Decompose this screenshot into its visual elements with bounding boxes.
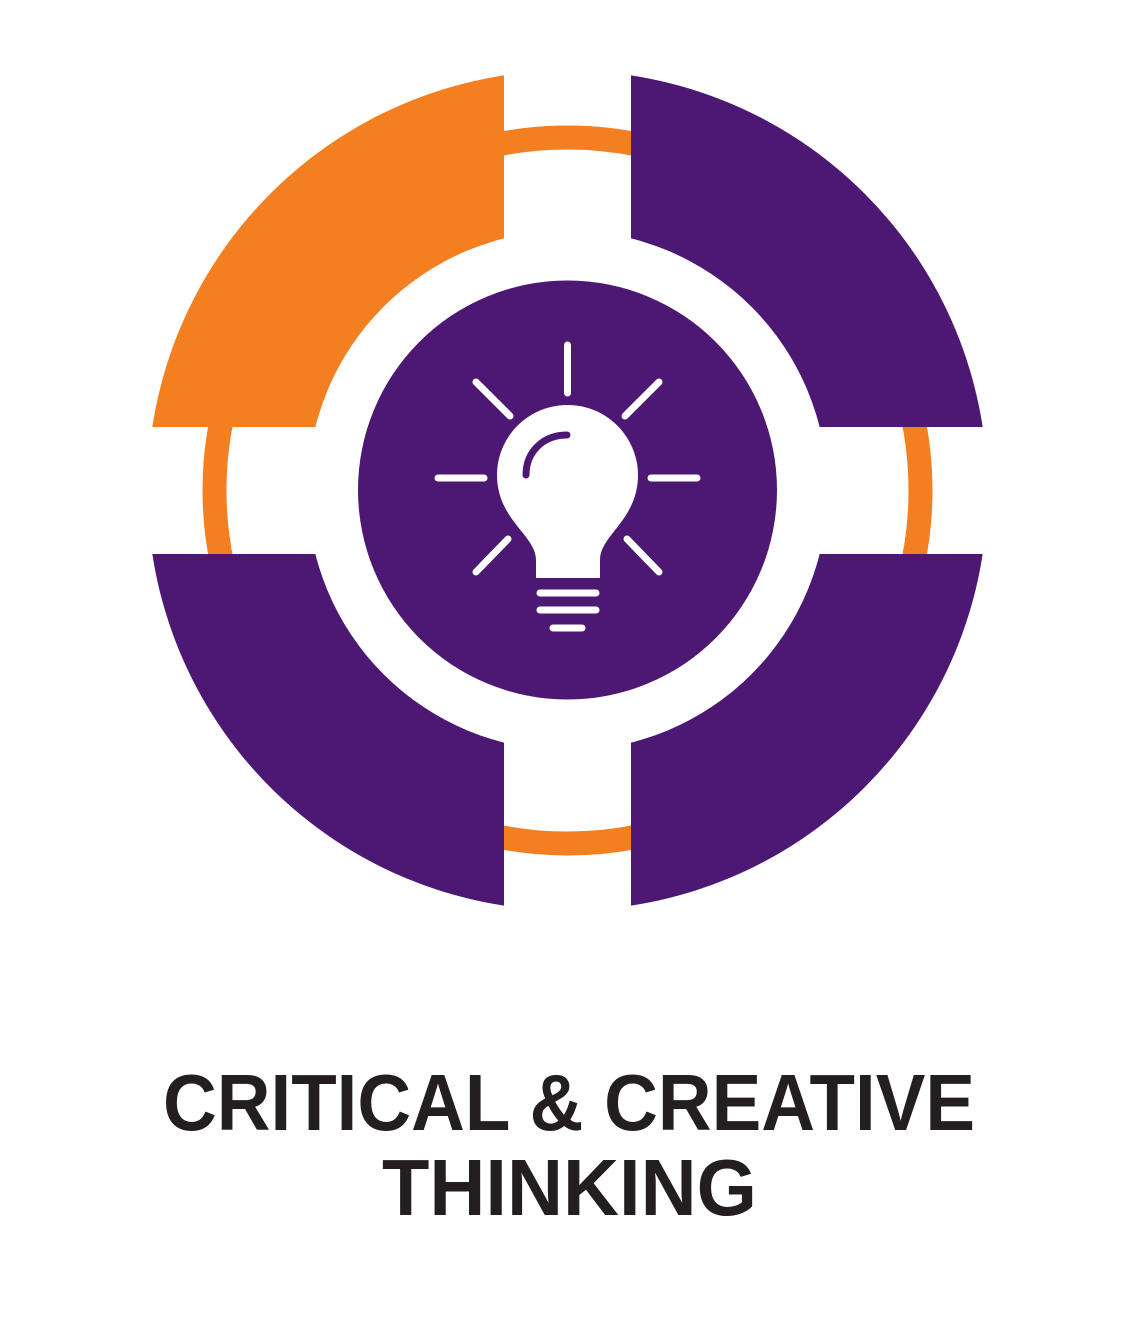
title: THINKING xyxy=(382,1143,757,1232)
quadrant: top-right purple xyxy=(631,75,983,427)
center circle xyxy=(358,280,777,700)
title: CRITICAL & CREATIVE xyxy=(163,1058,975,1147)
title xyxy=(163,1058,975,1232)
quadrant: bottom-right purple xyxy=(631,554,983,906)
orange ring xyxy=(214,138,920,844)
icon: light bulb xyxy=(438,345,697,628)
quadrant: bottom-left purple xyxy=(152,554,504,906)
quadrant: top-left orange xyxy=(152,75,504,427)
